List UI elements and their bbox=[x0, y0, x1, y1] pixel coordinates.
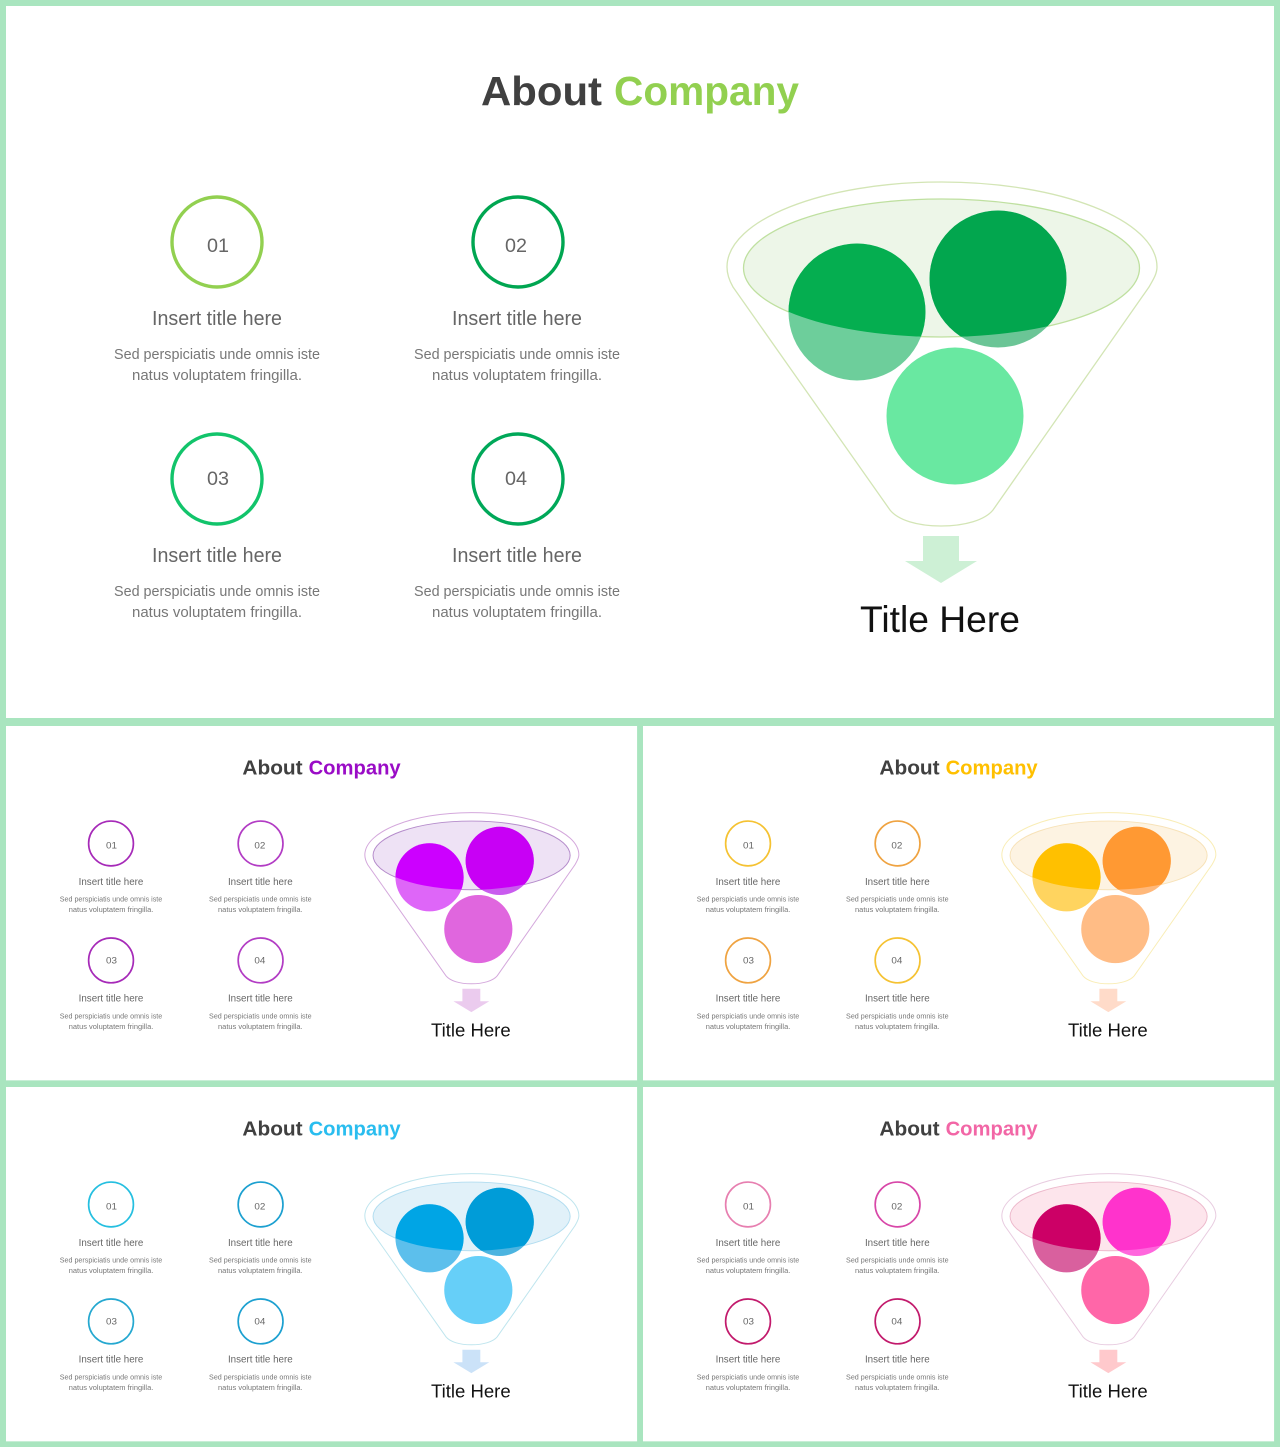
description 02 bbox=[846, 1256, 949, 1275]
ring 02 bbox=[875, 1182, 920, 1227]
ring 03 bbox=[726, 1299, 770, 1344]
description 04: natus voluptatem fringilla. bbox=[855, 1383, 940, 1392]
item title 01: Insert title here bbox=[79, 1238, 144, 1249]
ring 02 bbox=[238, 821, 283, 866]
funnel outline bbox=[727, 182, 1157, 526]
description 01 bbox=[697, 895, 799, 914]
number 02: 02 bbox=[891, 840, 902, 851]
description 02 bbox=[209, 1256, 312, 1275]
description 03: natus voluptatem fringilla. bbox=[132, 604, 302, 621]
funnel diagram bbox=[1002, 813, 1216, 984]
ball 2 bbox=[466, 1188, 534, 1256]
number 04: 04 bbox=[254, 955, 265, 966]
item 01 bbox=[60, 821, 162, 914]
panel: blue slide bbox=[6, 1087, 637, 1441]
result title: Title Here bbox=[1068, 1381, 1148, 1402]
description 03 bbox=[60, 1373, 162, 1392]
item title 04: Insert title here bbox=[228, 1355, 293, 1366]
arrow down bbox=[1090, 1350, 1126, 1373]
heading: Company bbox=[309, 757, 401, 779]
number 03: 03 bbox=[743, 955, 754, 966]
description 02: Sed perspiciatis unde omnis iste bbox=[846, 1256, 949, 1265]
result title: Title Here bbox=[431, 1020, 511, 1041]
description 04: Sed perspiciatis unde omnis iste bbox=[414, 583, 620, 600]
description 01: Sed perspiciatis unde omnis iste bbox=[697, 1256, 799, 1265]
description 01: natus voluptatem fringilla. bbox=[69, 905, 153, 914]
description 04: Sed perspiciatis unde omnis iste bbox=[209, 1012, 312, 1021]
description 03 bbox=[60, 1012, 162, 1031]
description 02 bbox=[846, 895, 949, 914]
item title 03: Insert title here bbox=[79, 994, 144, 1005]
item 04 bbox=[414, 434, 620, 621]
description 03: Sed perspiciatis unde omnis iste bbox=[697, 1012, 799, 1021]
description 04: Sed perspiciatis unde omnis iste bbox=[846, 1373, 949, 1382]
item title 02: Insert title here bbox=[865, 877, 930, 888]
description 04: natus voluptatem fringilla. bbox=[218, 1383, 303, 1392]
funnel outline bbox=[365, 1174, 579, 1345]
funnel outline bbox=[1002, 813, 1216, 984]
number 01: 01 bbox=[207, 236, 229, 257]
number 03: 03 bbox=[106, 955, 117, 966]
description 01 bbox=[60, 1256, 162, 1275]
description 04: natus voluptatem fringilla. bbox=[855, 1022, 940, 1031]
description 01: Sed perspiciatis unde omnis iste bbox=[60, 1256, 162, 1265]
number 01: 01 bbox=[106, 1201, 117, 1212]
funnel opening bbox=[744, 199, 1140, 337]
panel: green slide bbox=[6, 6, 1274, 718]
ball 3 bbox=[444, 1256, 512, 1324]
description 01: natus voluptatem fringilla. bbox=[706, 1266, 790, 1275]
number 04: 04 bbox=[891, 955, 902, 966]
description 04: Sed perspiciatis unde omnis iste bbox=[846, 1012, 949, 1021]
description 01: natus voluptatem fringilla. bbox=[706, 905, 790, 914]
item 01 bbox=[697, 1182, 799, 1275]
heading bbox=[879, 1118, 1038, 1140]
heading: About bbox=[242, 1118, 303, 1140]
item 03 bbox=[60, 1299, 162, 1392]
item 04 bbox=[846, 938, 949, 1031]
ring 03 bbox=[89, 938, 133, 983]
item title 01: Insert title here bbox=[716, 1238, 781, 1249]
ball 1 bbox=[1032, 1204, 1101, 1272]
arrow down bbox=[905, 536, 977, 583]
description 04 bbox=[209, 1373, 312, 1392]
item 02 bbox=[846, 821, 949, 914]
ball 1 bbox=[1032, 843, 1101, 911]
description 02: natus voluptatem fringilla. bbox=[432, 367, 602, 384]
item 03 bbox=[697, 938, 799, 1031]
item 03 bbox=[60, 938, 162, 1031]
ball 2 bbox=[466, 827, 534, 895]
funnel opening bbox=[373, 1182, 570, 1251]
description 01: natus voluptatem fringilla. bbox=[132, 367, 302, 384]
ring 04 bbox=[875, 1299, 920, 1344]
item title 04: Insert title here bbox=[865, 1355, 930, 1366]
ball 3 bbox=[1081, 1256, 1149, 1324]
ring 01 bbox=[89, 821, 133, 866]
description 01: natus voluptatem fringilla. bbox=[69, 1266, 153, 1275]
description 02: natus voluptatem fringilla. bbox=[855, 1266, 940, 1275]
description 03: Sed perspiciatis unde omnis iste bbox=[60, 1012, 162, 1021]
item title 01: Insert title here bbox=[79, 877, 144, 888]
ball 1 bbox=[395, 1204, 464, 1272]
description 03: Sed perspiciatis unde omnis iste bbox=[697, 1373, 799, 1382]
description 02: natus voluptatem fringilla. bbox=[218, 1266, 303, 1275]
arrow down bbox=[453, 989, 489, 1012]
item 04 bbox=[209, 1299, 312, 1392]
ring 04 bbox=[238, 938, 283, 983]
heading: Company bbox=[309, 1118, 401, 1140]
description 02: Sed perspiciatis unde omnis iste bbox=[209, 1256, 312, 1265]
description 01: Sed perspiciatis unde omnis iste bbox=[114, 346, 320, 363]
ring 02 bbox=[875, 821, 920, 866]
item title 04: Insert title here bbox=[865, 994, 930, 1005]
ring 02 bbox=[473, 197, 563, 287]
heading bbox=[879, 757, 1038, 779]
heading bbox=[242, 757, 401, 779]
description 03: natus voluptatem fringilla. bbox=[706, 1383, 790, 1392]
item 03 bbox=[114, 434, 320, 621]
number 02: 02 bbox=[505, 236, 527, 257]
panel: pink slide bbox=[643, 1087, 1274, 1441]
ring 04 bbox=[238, 1299, 283, 1344]
ball 3 bbox=[886, 348, 1024, 484]
item 01 bbox=[60, 1182, 162, 1275]
item 01 bbox=[697, 821, 799, 914]
item title 01: Insert title here bbox=[152, 308, 282, 330]
arrow down bbox=[1090, 989, 1126, 1012]
arrow down bbox=[453, 1350, 489, 1373]
description 03: Sed perspiciatis unde omnis iste bbox=[60, 1373, 162, 1382]
heading: Company bbox=[946, 757, 1038, 779]
ring 03 bbox=[89, 1299, 133, 1344]
item 04 bbox=[846, 1299, 949, 1392]
result title: Title Here bbox=[1068, 1020, 1148, 1041]
heading: About bbox=[481, 68, 602, 114]
number 04: 04 bbox=[505, 469, 527, 490]
item 02 bbox=[414, 197, 620, 384]
funnel outline bbox=[1002, 1174, 1216, 1345]
number 02: 02 bbox=[891, 1201, 902, 1212]
funnel opening bbox=[373, 821, 570, 890]
description 04 bbox=[209, 1012, 312, 1031]
heading bbox=[481, 68, 799, 114]
item title 03: Insert title here bbox=[716, 994, 781, 1005]
item title 02: Insert title here bbox=[228, 1238, 293, 1249]
item 02 bbox=[209, 1182, 312, 1275]
item title 02: Insert title here bbox=[228, 877, 293, 888]
item 04 bbox=[209, 938, 312, 1031]
ball 3 bbox=[444, 895, 512, 963]
funnel diagram bbox=[1002, 1174, 1216, 1345]
description 01: Sed perspiciatis unde omnis iste bbox=[60, 895, 162, 904]
number 02: 02 bbox=[254, 1201, 265, 1212]
number 04: 04 bbox=[891, 1316, 902, 1327]
item title 04: Insert title here bbox=[452, 545, 582, 567]
description 02: Sed perspiciatis unde omnis iste bbox=[414, 346, 620, 363]
funnel opening bbox=[1010, 821, 1207, 890]
item 02 bbox=[209, 821, 312, 914]
number 01: 01 bbox=[106, 840, 117, 851]
number 03: 03 bbox=[207, 469, 229, 490]
description 02: natus voluptatem fringilla. bbox=[218, 905, 303, 914]
item title 03: Insert title here bbox=[152, 545, 282, 567]
item 03 bbox=[697, 1299, 799, 1392]
number 03: 03 bbox=[106, 1316, 117, 1327]
funnel diagram bbox=[727, 182, 1157, 526]
ring 01 bbox=[726, 1182, 770, 1227]
heading: About bbox=[879, 757, 940, 779]
result title: Title Here bbox=[860, 599, 1020, 640]
description 01 bbox=[60, 895, 162, 914]
description 03 bbox=[697, 1012, 799, 1031]
ring 03 bbox=[172, 434, 262, 524]
description 03 bbox=[697, 1373, 799, 1392]
description 02 bbox=[209, 895, 312, 914]
description 04 bbox=[414, 583, 620, 621]
description 04: Sed perspiciatis unde omnis iste bbox=[209, 1373, 312, 1382]
ball 3 bbox=[1081, 895, 1149, 963]
number 02: 02 bbox=[254, 840, 265, 851]
ring 01 bbox=[172, 197, 262, 287]
number 03: 03 bbox=[743, 1316, 754, 1327]
description 03: Sed perspiciatis unde omnis iste bbox=[114, 583, 320, 600]
funnel opening bbox=[1010, 1182, 1207, 1251]
heading bbox=[242, 1118, 401, 1140]
ring 01 bbox=[726, 821, 770, 866]
ball 2 bbox=[930, 210, 1066, 348]
description 02 bbox=[414, 346, 620, 384]
description 01: Sed perspiciatis unde omnis iste bbox=[697, 895, 799, 904]
item title 04: Insert title here bbox=[228, 994, 293, 1005]
description 03 bbox=[114, 583, 320, 621]
ring 01 bbox=[89, 1182, 133, 1227]
ball 2 bbox=[1103, 827, 1171, 895]
description 01 bbox=[114, 346, 320, 384]
item 02 bbox=[846, 1182, 949, 1275]
description 04 bbox=[846, 1373, 949, 1392]
description 04 bbox=[846, 1012, 949, 1031]
number 01: 01 bbox=[743, 1201, 754, 1212]
description 04: natus voluptatem fringilla. bbox=[432, 604, 602, 621]
funnel diagram bbox=[365, 813, 579, 984]
heading: About bbox=[242, 757, 303, 779]
number 01: 01 bbox=[743, 840, 754, 851]
description 02: natus voluptatem fringilla. bbox=[855, 905, 940, 914]
ball 2 bbox=[1103, 1188, 1171, 1256]
ring 04 bbox=[875, 938, 920, 983]
ball 1 bbox=[788, 244, 926, 380]
result title: Title Here bbox=[431, 1381, 511, 1402]
description 01 bbox=[697, 1256, 799, 1275]
number 04: 04 bbox=[254, 1316, 265, 1327]
description 02: Sed perspiciatis unde omnis iste bbox=[209, 895, 312, 904]
heading: Company bbox=[614, 68, 799, 114]
item title 03: Insert title here bbox=[716, 1355, 781, 1366]
item title 03: Insert title here bbox=[79, 1355, 144, 1366]
description 03: natus voluptatem fringilla. bbox=[69, 1022, 153, 1031]
item 01 bbox=[114, 197, 320, 384]
funnel diagram bbox=[365, 1174, 579, 1345]
ring 02 bbox=[238, 1182, 283, 1227]
description 02: Sed perspiciatis unde omnis iste bbox=[846, 895, 949, 904]
ring 03 bbox=[726, 938, 770, 983]
item title 01: Insert title here bbox=[716, 877, 781, 888]
ring 04 bbox=[473, 434, 563, 524]
panel: purple slide bbox=[6, 726, 637, 1080]
heading: Company bbox=[946, 1118, 1038, 1140]
description 04: natus voluptatem fringilla. bbox=[218, 1022, 303, 1031]
item title 02: Insert title here bbox=[452, 308, 582, 330]
description 03: natus voluptatem fringilla. bbox=[706, 1022, 790, 1031]
heading: About bbox=[879, 1118, 940, 1140]
ball 1 bbox=[395, 843, 464, 911]
description 03: natus voluptatem fringilla. bbox=[69, 1383, 153, 1392]
item title 02: Insert title here bbox=[865, 1238, 930, 1249]
panel: orange slide bbox=[643, 726, 1274, 1080]
funnel outline bbox=[365, 813, 579, 984]
